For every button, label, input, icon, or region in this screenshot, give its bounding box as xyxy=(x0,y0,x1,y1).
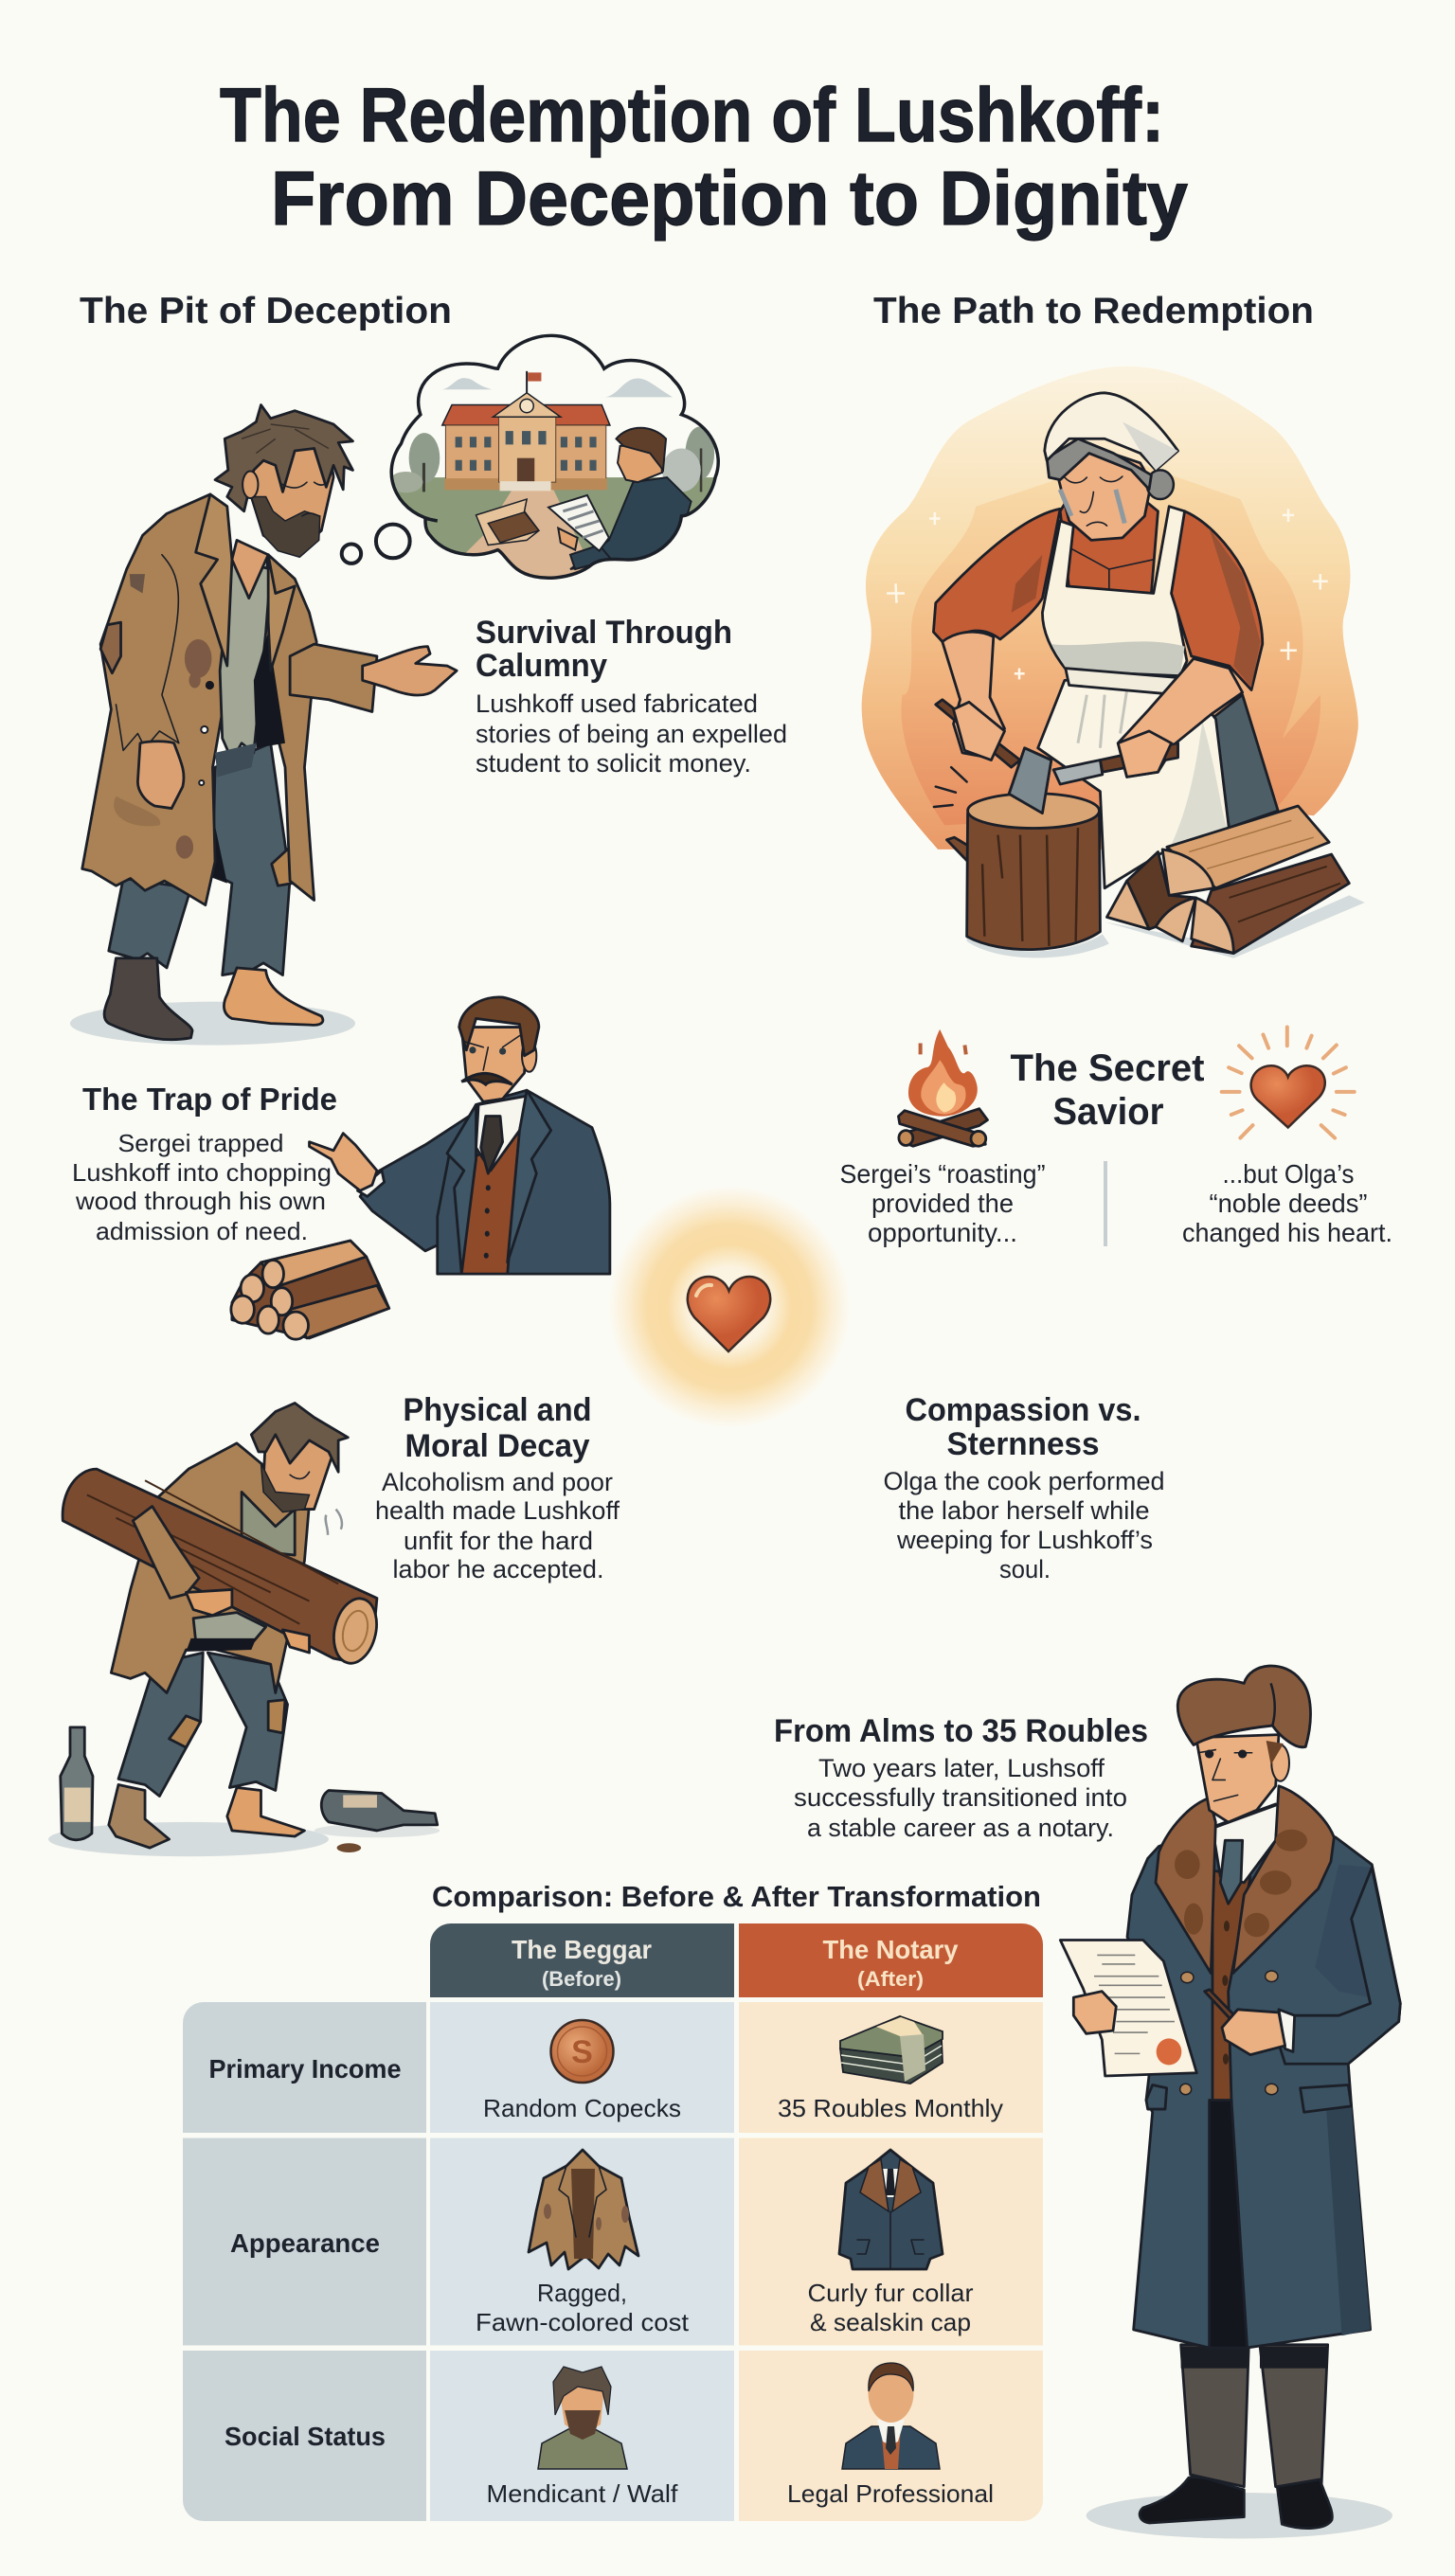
icon: stack of banknotes xyxy=(840,2016,943,2084)
row: primary income: Primary Income xyxy=(208,2054,402,2084)
title: The Redemption of Lushkoff: xyxy=(220,73,1164,158)
row: primary income xyxy=(183,2002,1043,2133)
text block: Physical and Moral Decay: unfit for the hard xyxy=(404,1527,593,1555)
text block: Compassion vs. Sternness: soul. xyxy=(999,1555,1051,1583)
text block: Survival Through Calumny: Calumny xyxy=(476,648,607,684)
heading: The Pit of Deception: The Pit of Deception xyxy=(80,291,452,331)
glowing heart at the centre xyxy=(608,1186,851,1428)
text block: Sergei's roasting: Sergei’s “roasting” xyxy=(839,1159,1046,1189)
illustration: ragged beggar with outstretched hand xyxy=(70,405,457,1046)
row: appearance xyxy=(183,2138,1043,2345)
row: primary income: Random Copecks xyxy=(483,2094,681,2122)
divider between Sergei and Olga xyxy=(1104,1161,1107,1246)
illustration: beggar staggering under a log with bottles xyxy=(48,1403,440,1856)
column header: The Notary: The Notary xyxy=(822,1935,959,1964)
icon: tattered coat xyxy=(529,2150,638,2269)
illustration: small stack of logs xyxy=(231,1241,389,1339)
text block: Compassion vs. Sternness: Olga the cook performed xyxy=(883,1467,1165,1495)
thought cloud: school and expelled student memory xyxy=(377,335,725,583)
text block: The Trap of Pride xyxy=(72,1082,337,1245)
text block: Physical and Moral Decay: Alcoholism and poor xyxy=(382,1468,613,1496)
row: social status: Social Status xyxy=(225,2422,386,2451)
text block: The Trap of Pride: admission of need. xyxy=(96,1217,308,1245)
text block: Compassion vs. Sternness: Sternness xyxy=(947,1426,1099,1462)
column header: The Notary: (After) xyxy=(857,1967,924,1991)
title: From Deception to Dignity xyxy=(271,156,1188,242)
icon: copper coin xyxy=(551,2020,614,2083)
row: social status: Legal Professional xyxy=(787,2479,994,2508)
column header: The Beggar: The Beggar xyxy=(512,1935,652,1964)
illustration: Olga the cook chopping wood in warm aura xyxy=(862,367,1365,958)
text block: Physical and Moral Decay: Moral Decay xyxy=(405,1428,590,1464)
text block: Sergei's roasting: provided the xyxy=(871,1189,1014,1218)
heading: The Path to Redemption: The Path to Redemption xyxy=(873,291,1314,331)
icon: fallen bottle and coin xyxy=(321,1791,438,1852)
icon: copper coin: S xyxy=(571,2034,593,2070)
text block: Sergei's roasting xyxy=(839,1159,1046,1247)
illustration: stern Sergei pointing xyxy=(310,997,610,1274)
row: appearance: Curly fur collar xyxy=(807,2279,974,2307)
icon: notary coat xyxy=(839,2150,943,2269)
text block: Physical and Moral Decay xyxy=(375,1392,620,1583)
text block: From Alms to 35 Roubles: From Alms to 35 Roubles xyxy=(774,1713,1148,1749)
column header: The Beggar: (Before) xyxy=(542,1967,621,1991)
text block: Physical and Moral Decay: labor he accepted. xyxy=(392,1555,604,1583)
text block: Compassion vs. Sternness xyxy=(883,1392,1165,1583)
text block: Physical and Moral Decay: Physical and xyxy=(404,1392,591,1428)
text block: The Trap of Pride: The Trap of Pride xyxy=(82,1082,337,1117)
heading: The Secret Savior xyxy=(1010,1047,1205,1133)
row: primary income: 35 Roubles Monthly xyxy=(778,2094,1003,2122)
title xyxy=(220,73,1188,242)
text block: Olga's noble deeds: ...but Olga’s xyxy=(1222,1159,1355,1189)
text block: Sergei's roasting: opportunity... xyxy=(868,1218,1017,1247)
icon: beggar bust xyxy=(538,2367,627,2469)
text block: From Alms to 35 Roubles: a stable career as a notary. xyxy=(807,1814,1114,1842)
text block: From Alms to 35 Roubles: successfully transitioned into xyxy=(794,1783,1127,1812)
text block: Compassion vs. Sternness: weeping for Lushkoff’s xyxy=(896,1526,1153,1554)
row: appearance: Ragged, xyxy=(537,2279,627,2307)
icon: upright bottle xyxy=(61,1727,93,1840)
text block: Survival Through Calumny: stories of being an expelled xyxy=(476,720,787,748)
comparison table xyxy=(183,1880,1043,2521)
illustration: the notary in fur collar coat with document xyxy=(1060,1666,1400,2539)
row: appearance: Fawn-colored cost xyxy=(476,2308,690,2336)
icon: radiant heart xyxy=(1222,1028,1355,1138)
text block: Compassion vs. Sternness: Compassion vs. xyxy=(906,1392,1141,1428)
row: appearance: Appearance xyxy=(230,2228,380,2258)
row: social status: Mendicant / Walf xyxy=(487,2479,678,2508)
icon: professional bust xyxy=(842,2363,940,2469)
text block: Survival Through Calumny: Lushkoff used fabricated xyxy=(476,689,758,718)
heading: The Secret Savior: Savior xyxy=(1053,1091,1163,1133)
text block: Compassion vs. Sternness: the labor herself while xyxy=(898,1496,1150,1525)
text block: Survival Through Calumny: Survival Through xyxy=(476,615,732,651)
text block: Physical and Moral Decay: health made Lushkoff xyxy=(375,1496,620,1525)
column header: The Beggar xyxy=(430,1923,734,1997)
column header: The Notary xyxy=(739,1923,1043,1997)
text block: The Trap of Pride: Lushkoff into chopping xyxy=(72,1158,332,1187)
text block: Olga's noble deeds xyxy=(1182,1159,1392,1247)
text block: From Alms to 35 Roubles xyxy=(774,1713,1148,1842)
text block: The Trap of Pride: wood through his own xyxy=(75,1187,326,1215)
text block: Olga's noble deeds: changed his heart. xyxy=(1182,1218,1392,1247)
row: social status xyxy=(183,2351,1043,2521)
text block: Survival Through Calumny: student to solicit money. xyxy=(476,749,751,778)
row: appearance: & sealskin cap xyxy=(810,2308,971,2336)
text block: From Alms to 35 Roubles: Two years later, Lushsoff xyxy=(818,1754,1105,1782)
text block: Survival Through Calumny xyxy=(476,615,787,778)
heading: The Secret Savior: The Secret xyxy=(1010,1047,1205,1089)
text block: The Trap of Pride: Sergei trapped xyxy=(117,1129,284,1157)
text block: Olga's noble deeds: “noble deeds” xyxy=(1209,1189,1368,1218)
table heading: Comparison: Before & After Transformation xyxy=(432,1880,1041,1913)
icon: campfire xyxy=(898,1029,987,1146)
